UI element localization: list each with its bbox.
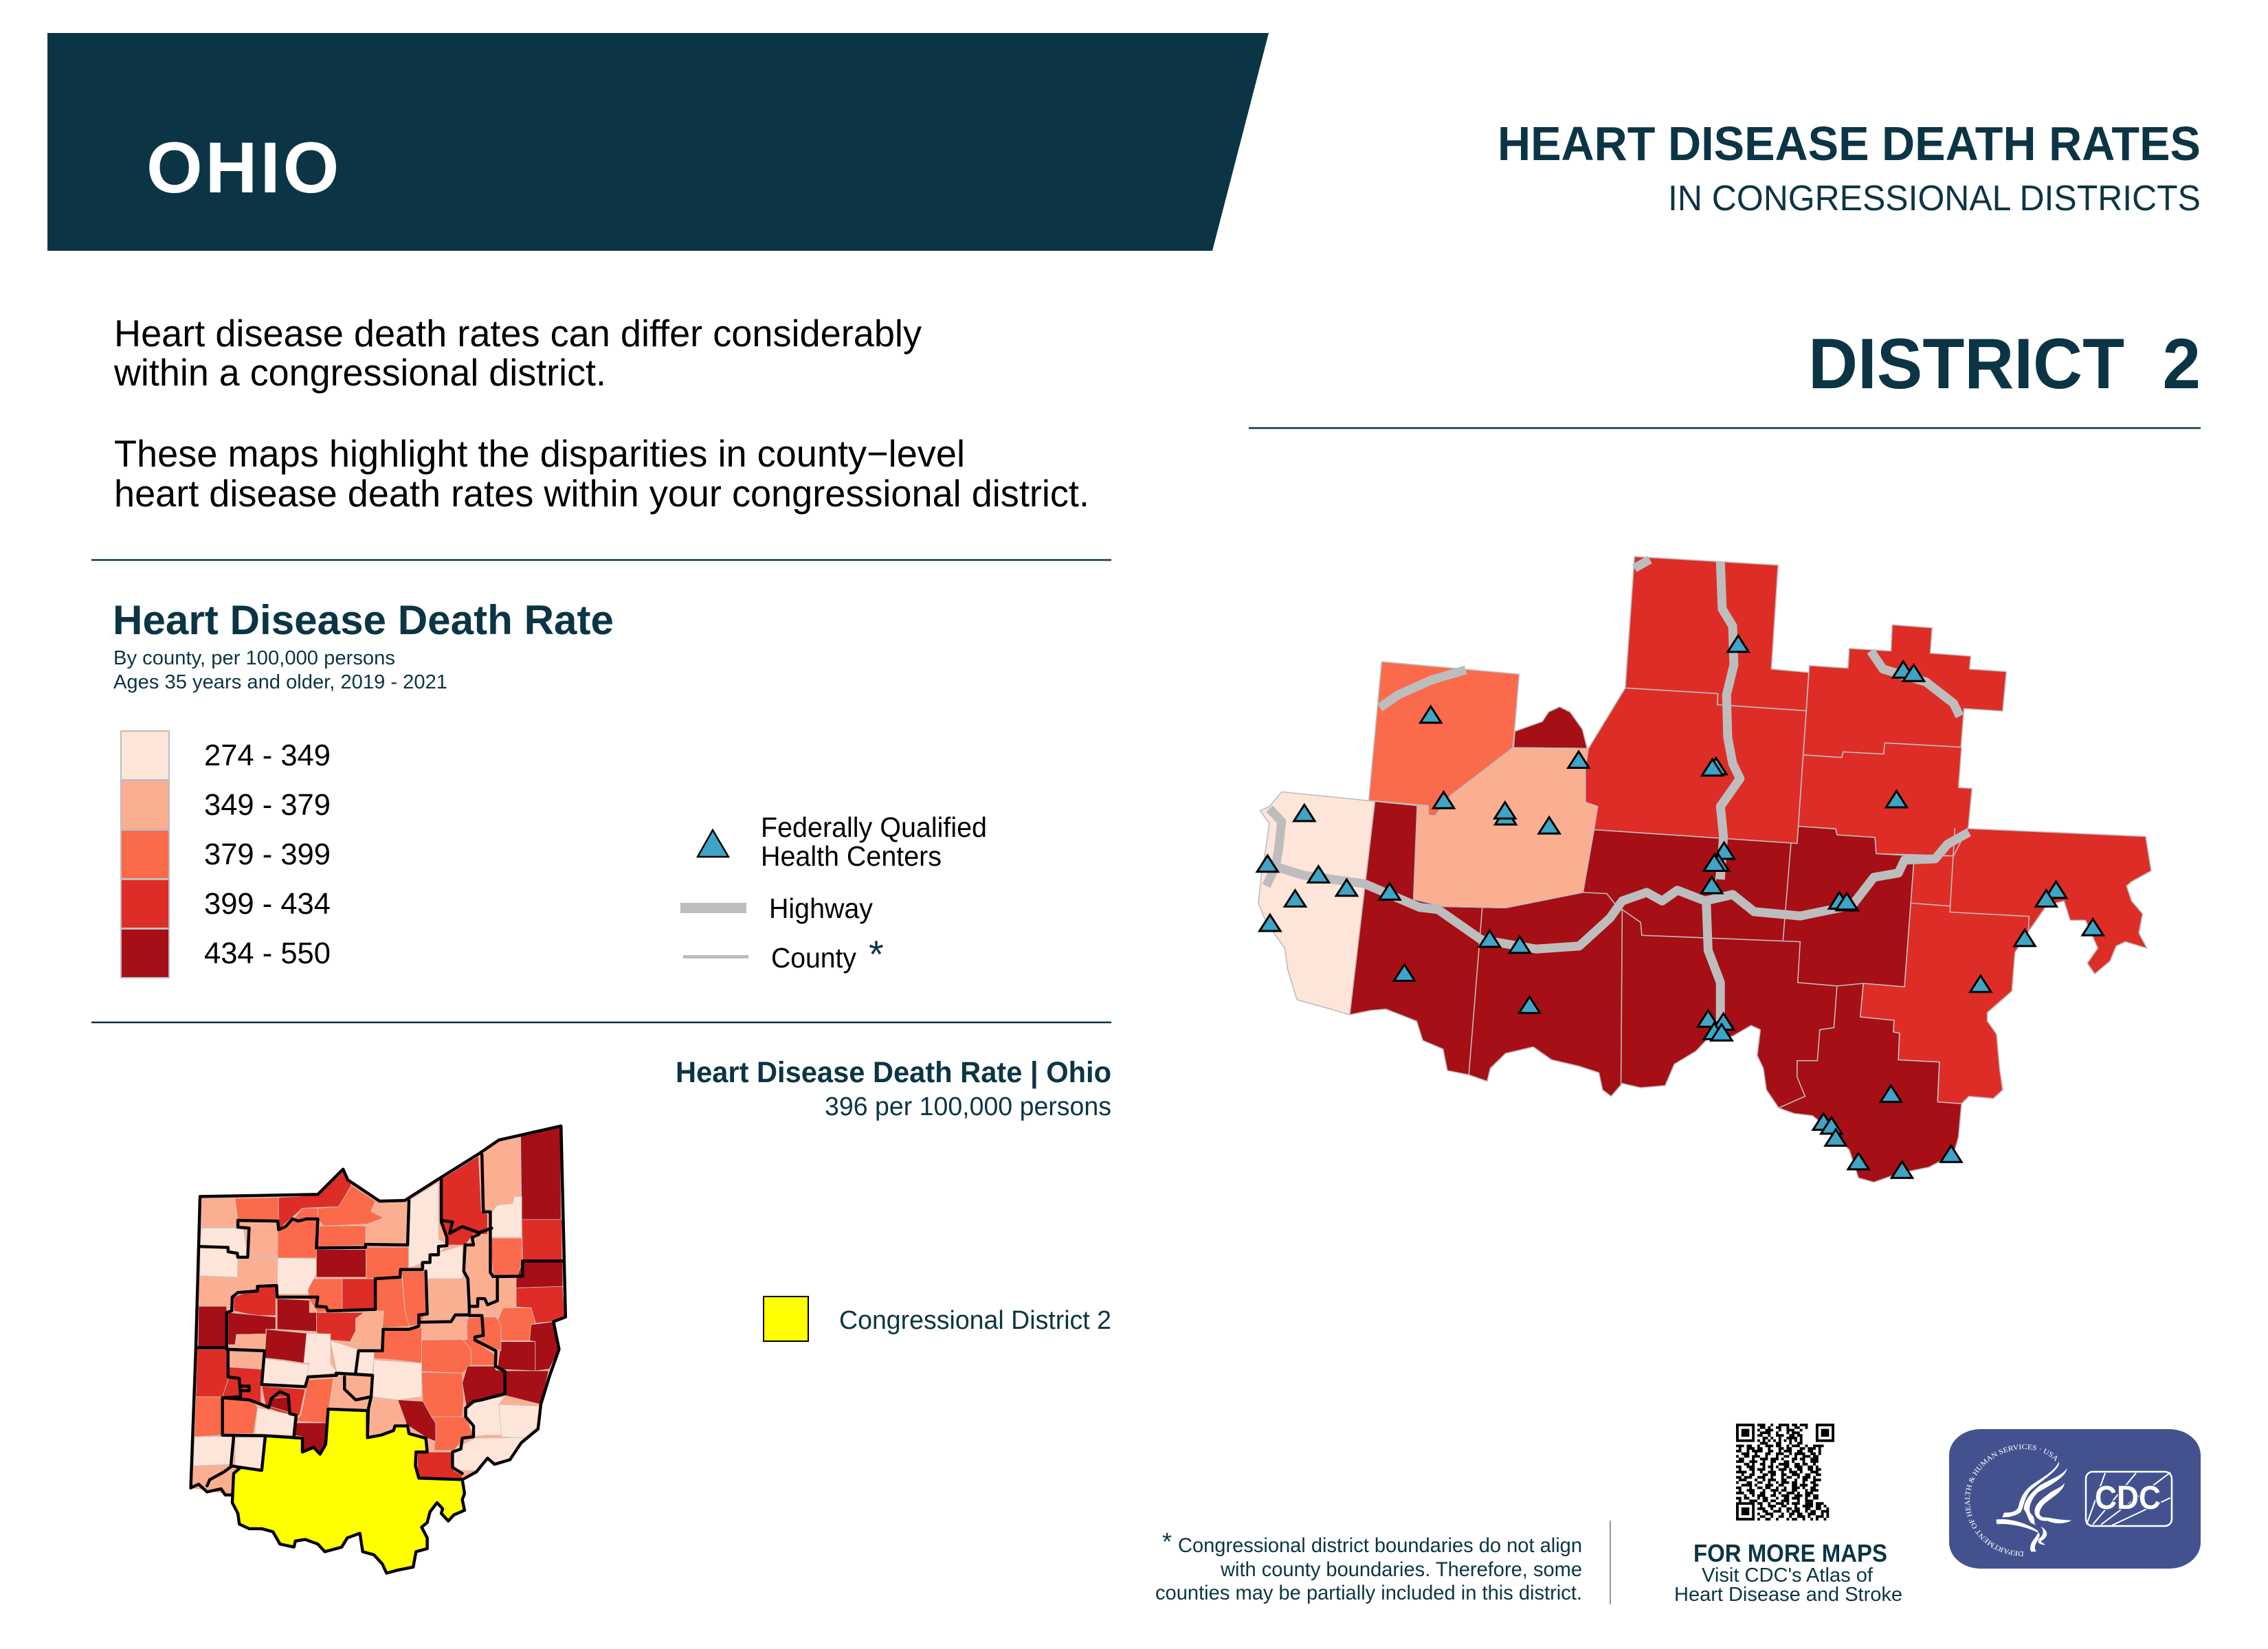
colour scale legend: 349 - 379 [204, 788, 331, 822]
highlighted district 2 [232, 1409, 465, 1573]
footnote: with county boundaries. Therefore, some [1220, 1558, 1582, 1581]
state summary text [676, 1056, 1111, 1121]
HHS and CDC logo badge [1949, 1429, 2201, 1569]
county: east central red [1799, 743, 1972, 856]
county: east red [1860, 828, 2151, 1103]
symbol legend: * [869, 932, 884, 976]
district 2 county map [1257, 557, 2151, 1182]
county: small dark north [1513, 707, 1587, 748]
symbol legend: County [771, 942, 856, 974]
legend heading: By county, per 100,000 persons [113, 647, 395, 669]
eagle emblem [1996, 1461, 2071, 1551]
report title: HEART DISEASE DEATH RATES [1498, 117, 2201, 170]
state summary text: Heart Disease Death Rate | Ohio [676, 1056, 1111, 1089]
CDC mark [2086, 1472, 2172, 1526]
report title: IN CONGRESSIONAL DISTRICTS [1668, 179, 2201, 218]
symbol legend [680, 811, 987, 976]
footnote: * [1162, 1527, 1172, 1556]
more maps text: FOR MORE MAPS [1693, 1539, 1887, 1567]
colour scale legend: 379 - 399 [204, 838, 331, 871]
more maps text: Heart Disease and Stroke [1674, 1584, 1902, 1606]
county: west lightest [1258, 792, 1375, 1015]
HHS and CDC logo badge: DEPARTMENT OF HEALTH & HUMAN SERVICES · USA [1965, 1444, 2058, 1556]
symbol legend: Highway [769, 893, 873, 924]
legend heading: Heart Disease Death Rate [113, 597, 614, 643]
symbol legend: Federally Qualified [761, 811, 987, 843]
more maps text: Visit CDC's Atlas of [1702, 1564, 1874, 1586]
intro text: These maps highlight the disparities in county−level [114, 432, 965, 475]
footnote: counties may be partially included in this district. [1155, 1582, 1582, 1604]
colour scale legend: 434 - 550 [204, 936, 331, 970]
intro text: within a congressional district. [113, 351, 606, 394]
county: top red [1625, 557, 1809, 710]
colour scale legend: 399 - 434 [204, 887, 331, 921]
report title [1498, 117, 2201, 218]
county group: darkest counties [1350, 801, 1961, 1182]
county: northeast red [1803, 625, 2006, 757]
intro text: Heart disease death rates can differ considerably [114, 312, 922, 355]
county: central north red [1586, 688, 1806, 844]
county: light orange centre [1414, 748, 1598, 908]
QR code [1736, 1425, 1833, 1519]
header band with state name [47, 33, 1269, 251]
county: northwest orange [1369, 662, 1519, 816]
state summary text: 396 per 100,000 persons [825, 1092, 1111, 1121]
legend heading: Ages 35 years and older, 2019 - 2021 [113, 671, 447, 693]
intro text: heart disease death rates within your congressional district. [114, 472, 1089, 515]
legend heading [113, 597, 614, 693]
district heading: DISTRICT 2 [1808, 324, 2201, 404]
footnote: Congressional district boundaries do not align [1178, 1534, 1582, 1557]
colour scale legend: 274 - 349 [204, 739, 331, 772]
more maps text [1674, 1539, 1902, 1606]
symbol legend: Health Centers [761, 840, 942, 872]
header band with state name: OHIO [146, 128, 342, 208]
highways [1267, 559, 1969, 1025]
health center markers [1257, 636, 2103, 1178]
footnote [1155, 1527, 1582, 1604]
intro text [113, 312, 1089, 515]
county borders [1469, 828, 2029, 1108]
district 2 legend key: Congressional District 2 [839, 1306, 1111, 1335]
district 2 legend key [764, 1297, 1111, 1341]
colour scale legend [121, 731, 331, 978]
Ohio state map with congressional districts [191, 1126, 566, 1573]
CDC mark: CDC [2095, 1480, 2161, 1516]
